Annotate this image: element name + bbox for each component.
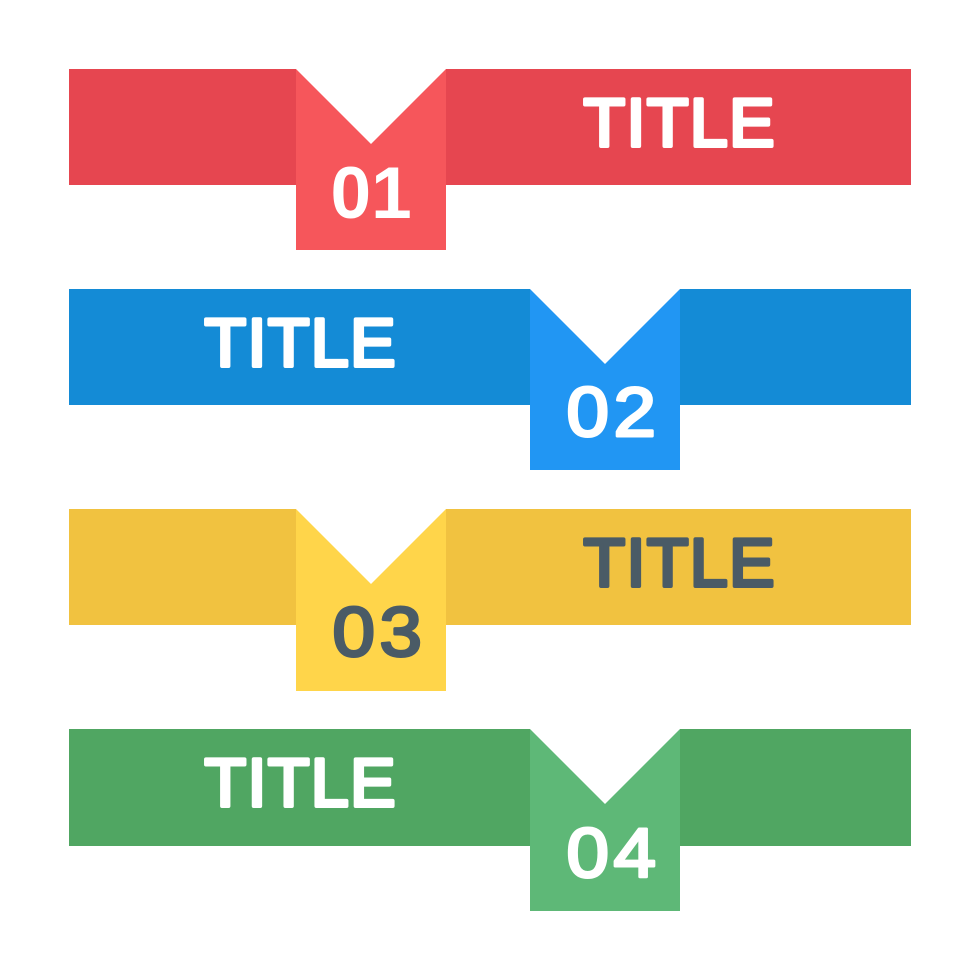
- ribbon 02: [69, 289, 911, 405]
- title 01: TITLE: [584, 85, 774, 161]
- ribbon 04: [69, 729, 911, 846]
- title 04: TITLE: [204, 745, 396, 821]
- panel: banner 02: [69, 289, 911, 470]
- tab 04: [530, 729, 680, 911]
- ribbon 01: [69, 69, 911, 185]
- ribbon 03: [69, 509, 911, 625]
- panel: banner 03: [69, 509, 911, 691]
- number 02: 02: [566, 373, 661, 451]
- panel: banner 04: [69, 729, 911, 911]
- title 03: TITLE: [584, 525, 774, 601]
- number 01: 01: [330, 153, 412, 234]
- tab 02: [530, 289, 680, 470]
- title 02: TITLE: [204, 305, 396, 381]
- panel: banner 01: [69, 69, 911, 250]
- number 04: 04: [566, 814, 661, 892]
- tab 01: [296, 69, 446, 250]
- number 03: 03: [332, 593, 427, 671]
- tab 03: [296, 509, 446, 691]
